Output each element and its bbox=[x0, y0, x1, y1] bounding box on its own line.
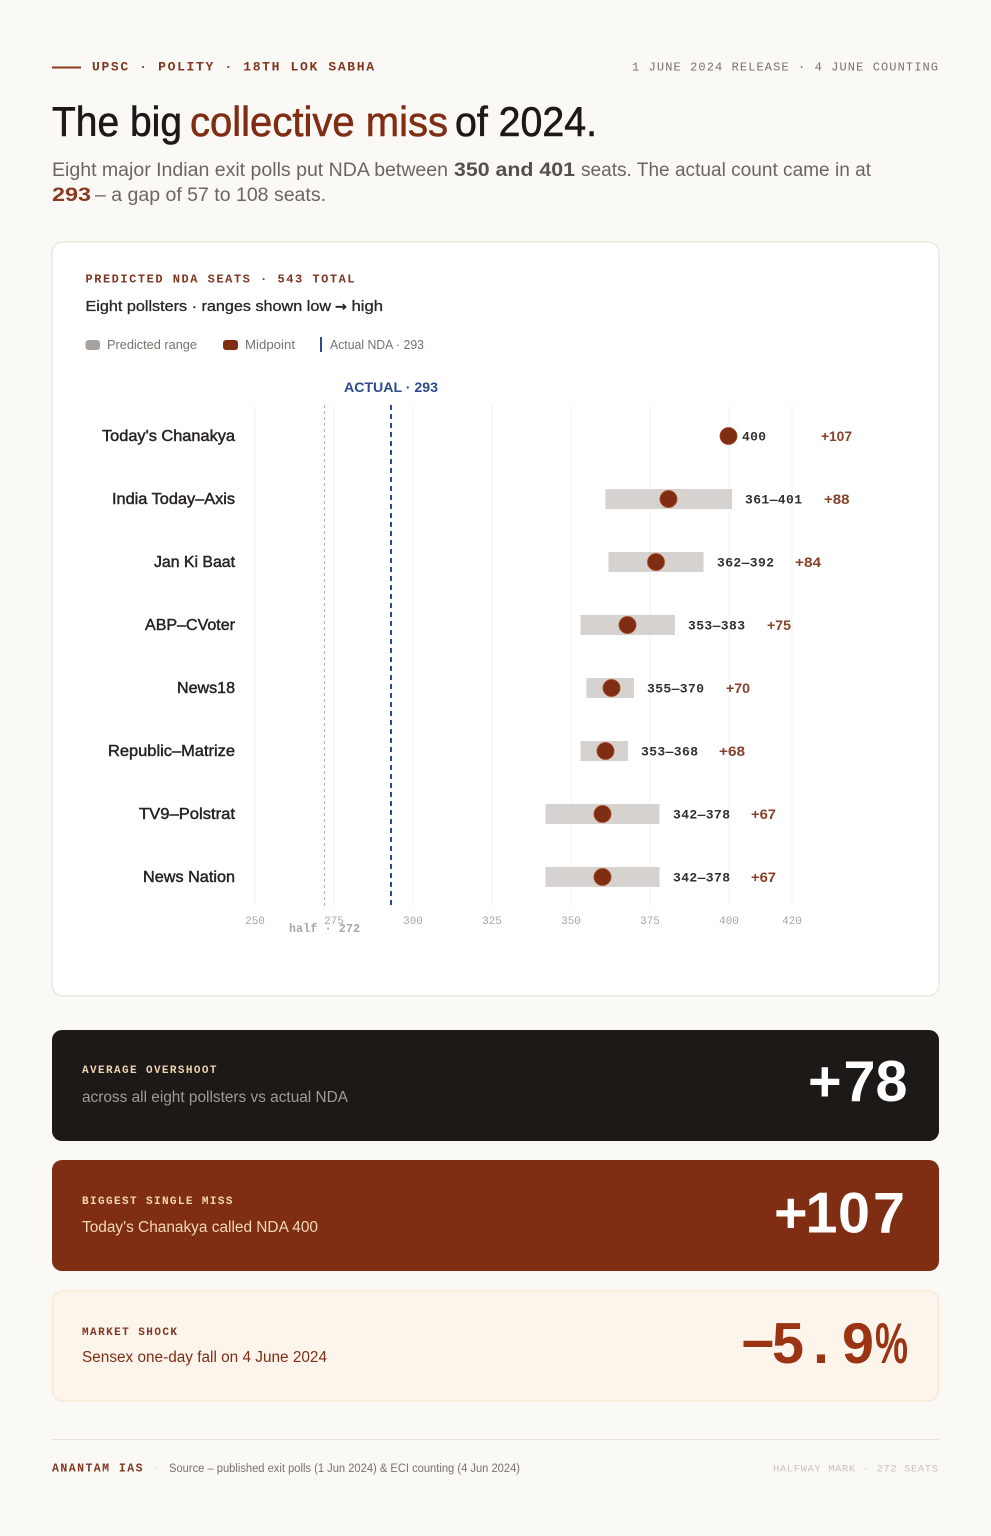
row: TV9-Polstrat: +67 bbox=[751, 807, 776, 822]
stat card: market shock: Sensex one-day fall on 4 June 2024 bbox=[82, 1349, 327, 1366]
row: Jan Ki Baat: 362—392 bbox=[717, 556, 774, 570]
panel: predicted NDA seats chart bbox=[52, 242, 939, 996]
row: TV9-Polstrat: TV9–Polstrat bbox=[139, 806, 236, 823]
stat card: biggest single miss bbox=[52, 1160, 939, 1271]
row: ABP-CVoter bbox=[145, 615, 792, 635]
chart heading: high bbox=[352, 298, 383, 315]
row: Republic-Matrize: Republic–Matrize bbox=[108, 743, 235, 760]
row: News18: +70 bbox=[726, 681, 750, 696]
subtitle: Eight major Indian exit polls put NDA between bbox=[52, 160, 448, 181]
x axis labels: 325 bbox=[482, 916, 502, 928]
stat card: average overshoot: AVERAGE OVERSHOOT bbox=[82, 1065, 217, 1077]
row: News18: News18 bbox=[177, 680, 235, 697]
row: TV9-Polstrat: 342—378 bbox=[673, 808, 730, 822]
row: TV9-Polstrat bbox=[139, 804, 776, 824]
row: News Nation: News Nation bbox=[143, 869, 235, 886]
row: Today's Chanakya: Today's Chanakya bbox=[102, 428, 235, 445]
x axis labels: 420 bbox=[782, 916, 802, 928]
stat card: biggest single miss: +107 bbox=[774, 1182, 905, 1246]
chart eyebrow: PREDICTED NDA SEATS · 543 TOTAL bbox=[86, 272, 354, 286]
stat card: average overshoot: +78 bbox=[808, 1050, 907, 1114]
row: Jan Ki Baat: Jan Ki Baat bbox=[154, 554, 236, 571]
subtitle: seats. The actual count came in at bbox=[581, 160, 872, 181]
x axis labels: 350 bbox=[561, 916, 581, 928]
footer: ANANTAM IAS bbox=[52, 1462, 143, 1476]
row: Republic-Matrize: +68 bbox=[719, 744, 746, 759]
footer bbox=[52, 1439, 939, 1476]
row: News18 bbox=[177, 678, 750, 698]
legend: Actual NDA · 293 bbox=[330, 338, 424, 352]
stat card: market shock bbox=[52, 1291, 938, 1401]
footer: HALFWAY MARK · 272 SEATS bbox=[773, 1464, 938, 1476]
legend: Midpoint bbox=[245, 338, 296, 352]
stat card: market shock: % bbox=[875, 1312, 908, 1376]
row: India Today-Axis: India Today–Axis bbox=[112, 491, 235, 508]
row: Republic-Matrize: 353—368 bbox=[641, 744, 698, 760]
row: ABP-CVoter: +75 bbox=[767, 618, 792, 633]
stat card: average overshoot: across all eight pollsters vs actual NDA bbox=[82, 1089, 349, 1106]
x axis labels: 300 bbox=[403, 916, 423, 928]
title bbox=[52, 98, 597, 145]
x axis labels bbox=[245, 916, 802, 928]
row: Republic-Matrize bbox=[108, 741, 746, 761]
row: India Today-Axis: +88 bbox=[824, 492, 850, 507]
row: News18: 355—370 bbox=[647, 682, 704, 696]
release dates: 1 JUNE 2024 RELEASE · 4 JUNE COUNTING bbox=[632, 60, 938, 74]
stat card: biggest single miss: BIGGEST SINGLE MISS bbox=[82, 1196, 233, 1208]
subtitle: 293 bbox=[52, 185, 91, 206]
row: News Nation bbox=[143, 867, 776, 887]
row: Today's Chanakya: +107 bbox=[821, 429, 852, 444]
stat card: average overshoot bbox=[52, 1030, 939, 1141]
halfway label: half · 272 bbox=[289, 923, 360, 936]
title: The big bbox=[52, 98, 182, 145]
footer: Source – published exit polls (1 Jun 2024) & ECI counting (4 Jun 2024) bbox=[169, 1463, 520, 1475]
legend bbox=[86, 337, 424, 352]
x axis labels: 400 bbox=[719, 916, 739, 928]
row: Jan Ki Baat: +84 bbox=[795, 555, 822, 570]
chart grid and reference lines bbox=[255, 405, 792, 906]
stat card: market shock: −5.9 bbox=[741, 1312, 874, 1376]
row: Jan Ki Baat bbox=[154, 552, 822, 572]
row: Today's Chanakya bbox=[102, 428, 852, 445]
actual line label: ACTUAL · 293 bbox=[344, 379, 438, 395]
x axis labels: 275 bbox=[324, 916, 344, 928]
title: of 2024. bbox=[455, 98, 597, 145]
row: News Nation: 342—378 bbox=[673, 870, 730, 886]
x axis labels: 250 bbox=[245, 916, 265, 928]
subtitle: 350 and 401 bbox=[454, 160, 575, 181]
subtitle bbox=[52, 160, 872, 206]
row: ABP-CVoter: ABP–CVoter bbox=[145, 617, 236, 634]
header eyebrow: UPSC · POLITY · 18TH LOK SABHA bbox=[92, 60, 374, 74]
row: Today's Chanakya: 400 bbox=[742, 430, 766, 444]
subtitle: – a gap of 57 to 108 seats. bbox=[95, 185, 326, 206]
chart heading: → bbox=[335, 300, 347, 315]
row: India Today-Axis: 361—401 bbox=[745, 492, 802, 508]
stat card: biggest single miss: Today's Chanakya called NDA 400 bbox=[82, 1219, 318, 1236]
x axis labels: 375 bbox=[640, 916, 660, 928]
row: ABP-CVoter: 353—383 bbox=[688, 618, 745, 634]
title: collective miss bbox=[190, 98, 448, 145]
row: News Nation: +67 bbox=[751, 870, 776, 885]
chart heading: Eight pollsters · ranges shown low bbox=[86, 298, 331, 315]
footer: · bbox=[155, 1462, 159, 1474]
stat card: market shock: MARKET SHOCK bbox=[82, 1327, 177, 1339]
row: India Today-Axis bbox=[112, 489, 850, 509]
legend: Predicted range bbox=[107, 338, 197, 352]
